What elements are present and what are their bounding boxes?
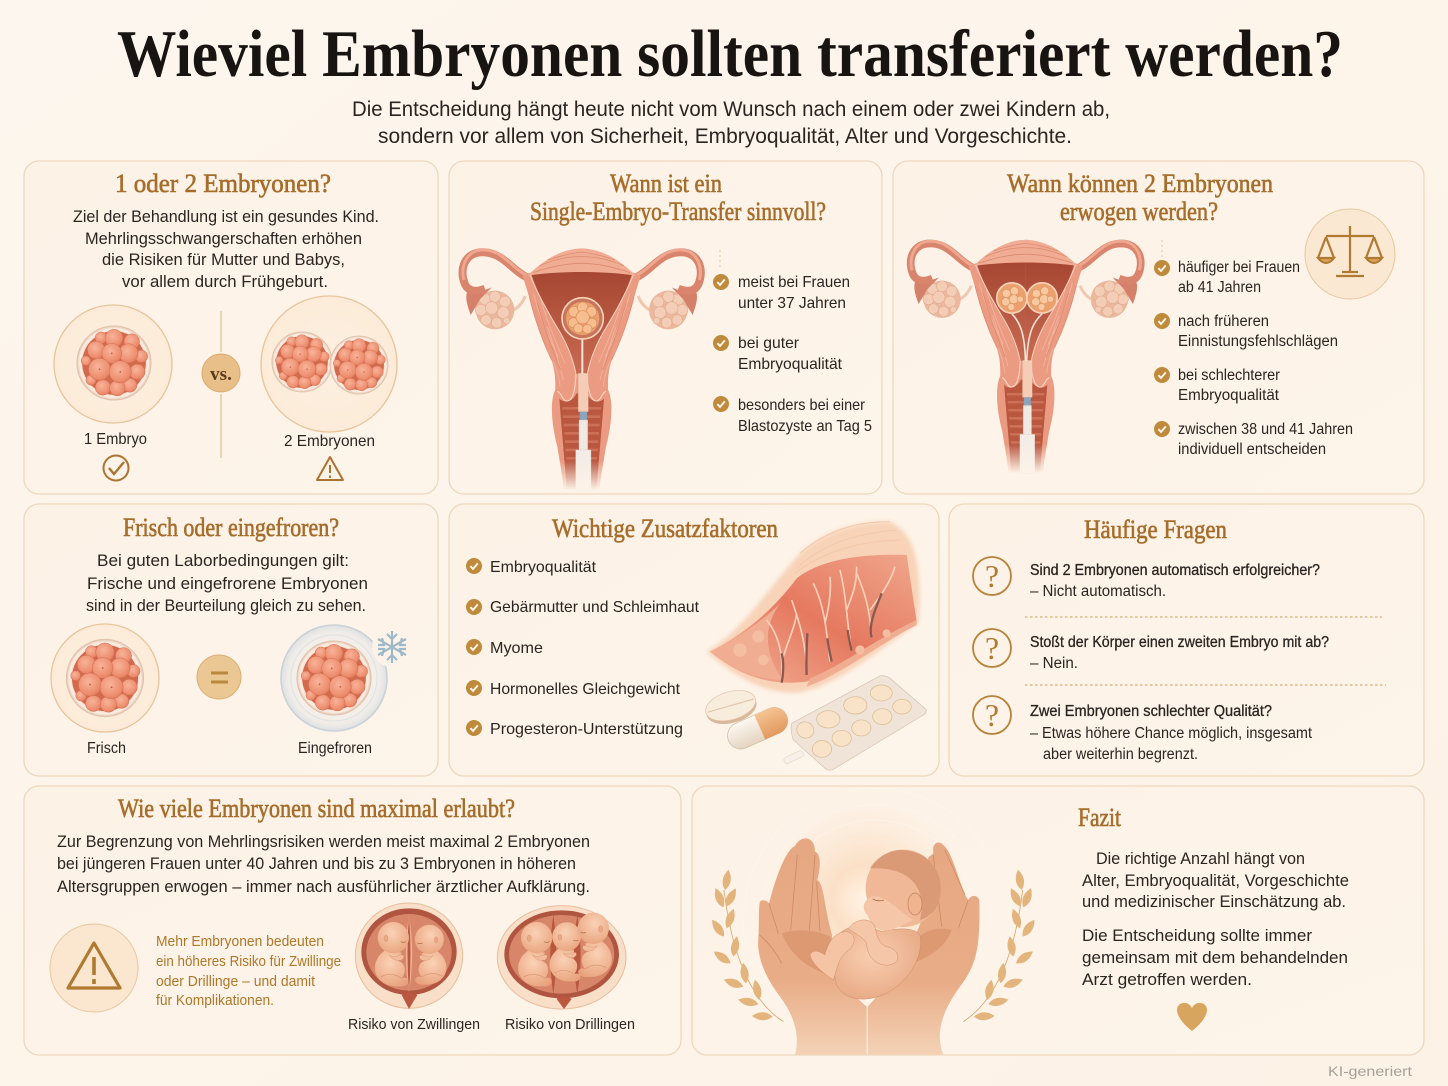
bullet list: Blastozyste an Tag 5	[738, 418, 872, 435]
question 3	[973, 696, 1313, 763]
conclusion text: Arzt getroffen werden.	[1082, 970, 1252, 989]
question 2: Stoßt der Körper einen zweiten Embryo mit ab?	[1030, 634, 1329, 651]
illustration: fresh embryo	[51, 624, 159, 732]
heading	[530, 169, 826, 226]
illustration: one embryo	[54, 305, 172, 423]
illustration: baby in hands	[709, 788, 1038, 1055]
conclusion text: und medizinischer Einschätzung ab.	[1082, 892, 1346, 911]
heading: Wann können 2 Embryonen	[1007, 169, 1273, 198]
bullet list	[1154, 259, 1353, 458]
bullet list	[713, 274, 872, 435]
subtitle: Die Entscheidung hängt heute nicht vom Wunsch nach einem oder zwei Kindern ab,	[352, 98, 1110, 121]
intro text: Frische und eingefrorene Embryonen	[87, 574, 368, 593]
intro text: sind in der Beurteilung gleich zu sehen.	[86, 596, 366, 615]
illustration: endometrium	[702, 522, 926, 770]
panel: 2 Embryonen erwogen	[893, 161, 1424, 494]
bullet list: zwischen 38 und 41 Jahren	[1178, 421, 1353, 438]
bullet list: bei guter	[738, 335, 800, 352]
panel: Wichtige Zusatzfaktoren	[449, 504, 939, 776]
intro text: Bei guten Laborbedingungen gilt:	[97, 551, 349, 570]
conclusion text: gemeinsam mit dem behandelnden	[1082, 948, 1348, 967]
heading: erwogen werden?	[1060, 197, 1218, 226]
question 1	[973, 557, 1320, 600]
subtitle	[352, 98, 1110, 148]
question 3: aber weiterhin begrenzt.	[1043, 746, 1198, 763]
bullet list: Hormonelles Gleichgewicht	[490, 681, 681, 698]
heading: Frisch oder eingefroren?	[123, 513, 339, 542]
warning text: ein höheres Risiko für Zwillinge	[156, 954, 341, 970]
heading: Häufige Fragen	[1084, 515, 1227, 544]
icon: warning	[317, 457, 343, 480]
label: twins: Risiko von Zwillingen	[348, 1016, 480, 1033]
vs badge: vs.	[210, 364, 232, 385]
panel: Frisch oder eingefroren	[24, 504, 438, 776]
label: Frisch: Frisch	[87, 740, 126, 757]
intro text: vor allem durch Frühgeburt.	[122, 272, 328, 291]
bullet list: bei schlechterer	[1178, 367, 1280, 384]
body text: bei jüngeren Frauen unter 40 Jahren und bis zu 3 Embryonen in höheren	[57, 854, 576, 873]
warning text: für Komplikationen.	[156, 993, 274, 1009]
bullet list: individuell entscheiden	[1178, 441, 1326, 458]
body text: Zur Begrenzung von Mehrlingsrisiken werden meist maximal 2 Embryonen	[57, 832, 590, 851]
question 3: ?	[985, 697, 999, 733]
icon: snowflake	[378, 631, 406, 663]
conclusion text: Die Entscheidung sollte immer	[1082, 926, 1312, 945]
panel: Häufige Fragen	[949, 504, 1424, 776]
body text: Altersgruppen erwogen – immer nach ausführlicher ärztlicher Aufklärung.	[57, 877, 590, 896]
intro text: Mehrlingsschwangerschaften erhöhen	[85, 229, 362, 248]
subtitle: sondern vor allem von Sicherheit, Embryoqualität, Alter und Vorgeschichte.	[378, 125, 1072, 148]
panel: maximal erlaubt	[24, 786, 681, 1055]
question 1: ?	[985, 558, 999, 594]
heading: Fazit	[1078, 803, 1122, 832]
question 2: ?	[985, 630, 999, 666]
warning text: oder Drillinge – und damit	[156, 974, 315, 990]
vs badge	[202, 311, 240, 458]
intro text: Ziel der Behandlung ist ein gesundes Kind.	[73, 207, 379, 226]
icon: heart	[1177, 1003, 1207, 1031]
illustration: twins	[355, 903, 463, 1009]
intro text: die Risiken für Mutter und Babys,	[102, 250, 345, 269]
illustration: uterus with two embryos	[911, 240, 1141, 473]
illustration: two embryos	[261, 296, 397, 432]
bullet list: häufiger bei Frauen	[1178, 259, 1300, 276]
question 1: Sind 2 Embryonen automatisch erfolgreicher?	[1030, 562, 1320, 579]
conclusion text: Die richtige Anzahl hängt von	[1096, 849, 1305, 868]
intro text	[86, 551, 368, 615]
warning text: Mehr Embryonen bedeuten	[156, 934, 324, 950]
heading: Wichtige Zusatzfaktoren	[552, 514, 778, 543]
question 2: – Nein.	[1030, 655, 1078, 672]
bullet list: nach früheren	[1178, 313, 1269, 330]
panel: Single-Embryo-Transfer	[449, 161, 882, 494]
bullet list: Progesteron-Unterstützung	[490, 721, 683, 738]
bullet list: Embryoqualität	[738, 356, 843, 373]
bullet list: unter 37 Jahren	[738, 295, 846, 312]
conclusion text: Alter, Embryoqualität, Vorgeschichte	[1082, 871, 1349, 890]
panel: Fazit	[692, 786, 1424, 1055]
label: Eingefroren: Eingefroren	[298, 740, 372, 757]
question 3: Zwei Embryonen schlechter Qualität?	[1030, 703, 1272, 720]
conclusion text	[1082, 849, 1349, 989]
label: triplets: Risiko von Drillingen	[505, 1016, 635, 1033]
illustration: frozen embryo	[281, 625, 412, 731]
icon: check	[104, 456, 128, 480]
illustration: uterus with one embryo	[462, 248, 701, 490]
bullet list: besonders bei einer	[738, 397, 866, 414]
heading	[1007, 169, 1273, 226]
intro text	[73, 207, 379, 291]
bullet list: ab 41 Jahren	[1178, 279, 1261, 296]
icon: warning	[50, 924, 138, 1012]
bullet list: Embryoqualität	[490, 559, 597, 576]
watermark: KI-generiert	[1328, 1063, 1412, 1079]
panel: 1 oder 2 Embryonen	[24, 161, 438, 494]
bullet list: Myome	[490, 640, 543, 657]
label: 1 Embryo: 1 Embryo	[84, 431, 147, 448]
bullet list: meist bei Frauen	[738, 274, 850, 291]
icon: scales	[1305, 209, 1395, 299]
label: 2 Embryonen: 2 Embryonen	[284, 433, 375, 450]
heading: Wann ist ein	[610, 169, 722, 198]
bullet list: Einnistungsfehlschlägen	[1178, 333, 1338, 350]
warning text	[156, 934, 341, 1009]
question 3: – Etwas höhere Chance möglich, insgesamt	[1030, 725, 1313, 742]
question 1: – Nicht automatisch.	[1030, 583, 1166, 600]
body text	[57, 832, 590, 896]
bullet list	[466, 558, 700, 738]
bullet list: Gebärmutter und Schleimhaut	[490, 599, 700, 616]
heading: 1 oder 2 Embryonen?	[115, 169, 331, 198]
equals badge	[197, 655, 241, 699]
illustration: triplets	[497, 906, 626, 1009]
bullet list: Embryoqualität	[1178, 387, 1280, 404]
question 2	[973, 629, 1329, 672]
heading: Single-Embryo-Transfer sinnvoll?	[530, 197, 826, 226]
heading: Wie viele Embryonen sind maximal erlaubt?	[118, 794, 515, 823]
